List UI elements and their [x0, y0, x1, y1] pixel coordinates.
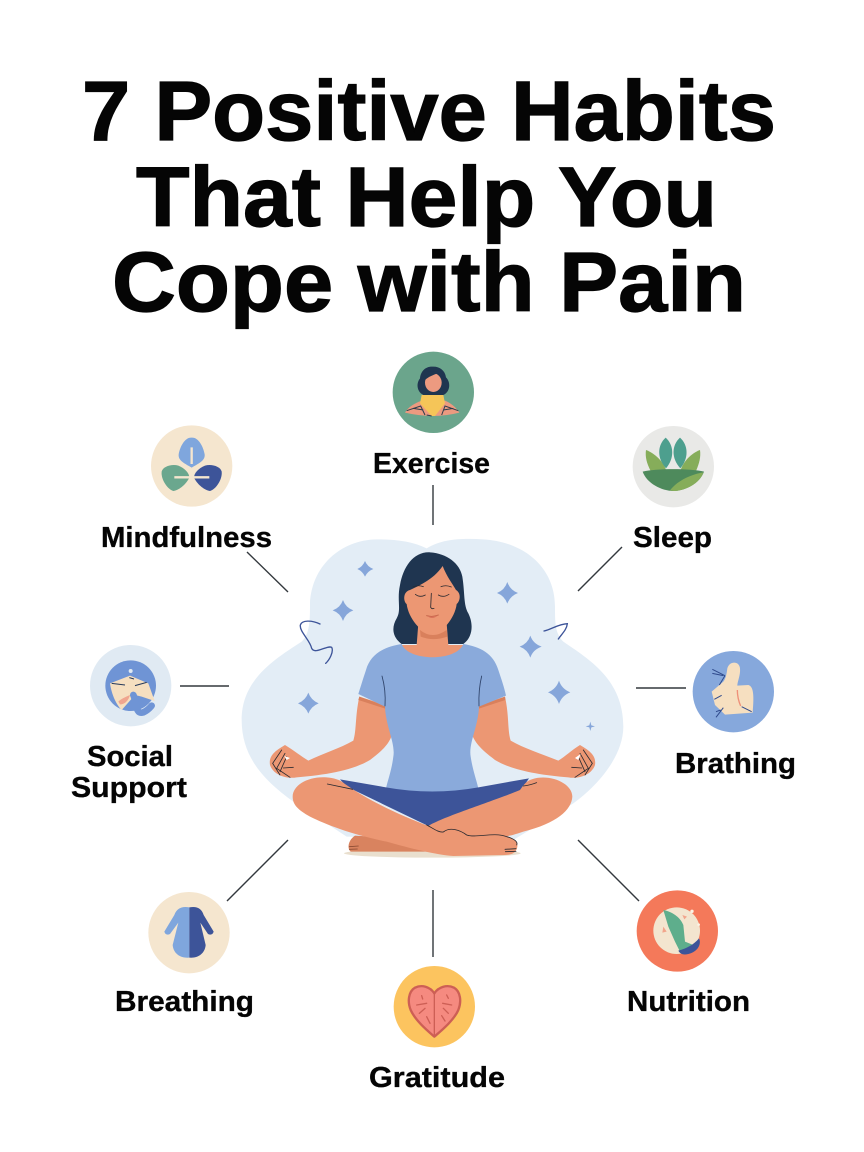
title: 7 Positive Habits [82, 64, 776, 158]
title: Cope with Pain [112, 235, 746, 329]
label: Sleep [633, 522, 712, 554]
item: Nutrition [627, 890, 750, 1018]
ground shadow [344, 849, 521, 858]
label: Breathing [115, 986, 254, 1018]
face [404, 566, 460, 634]
shorts [340, 778, 529, 826]
icon: social support [90, 645, 171, 726]
item: Social Support [71, 645, 187, 804]
leg lines [327, 783, 537, 852]
icon: thumbs up [693, 651, 774, 732]
item: Sleep [633, 426, 714, 554]
item: Breathing (left) [115, 892, 254, 1018]
label: Mindfulness [101, 522, 272, 554]
item: Exercise [373, 352, 490, 480]
icon: lungs [148, 892, 230, 973]
title [82, 64, 776, 329]
label: Gratitude [369, 1062, 505, 1094]
spoke lines [180, 485, 686, 957]
label: Brathing [675, 748, 796, 780]
background cloud [242, 539, 623, 840]
label: Social [87, 741, 173, 773]
item: Brathing (right) [675, 651, 796, 780]
item: Gratitude [369, 966, 505, 1094]
face features [413, 586, 451, 616]
squiggles [300, 621, 567, 663]
icon: heart [394, 966, 475, 1047]
t-shirt seams [382, 676, 482, 706]
back hair [393, 552, 472, 644]
hand lines [273, 750, 592, 777]
icon: woman [393, 352, 474, 433]
crossed legs [293, 777, 572, 856]
sparkles [298, 561, 595, 731]
arms [270, 697, 393, 778]
neck [400, 623, 465, 659]
label: Exercise [373, 448, 490, 480]
label [71, 741, 187, 804]
icon: three leaves [151, 425, 232, 507]
central illustration: meditating woman [242, 539, 623, 858]
title: That Help You [136, 150, 717, 244]
back foot [349, 836, 443, 852]
sleeve shadows [358, 697, 385, 709]
icon: plant [633, 426, 714, 507]
t-shirt [358, 644, 506, 792]
item: Mindfulness [101, 425, 272, 554]
icon: food bowl [637, 890, 718, 972]
label: Nutrition [627, 986, 750, 1018]
label: Support [71, 772, 187, 804]
